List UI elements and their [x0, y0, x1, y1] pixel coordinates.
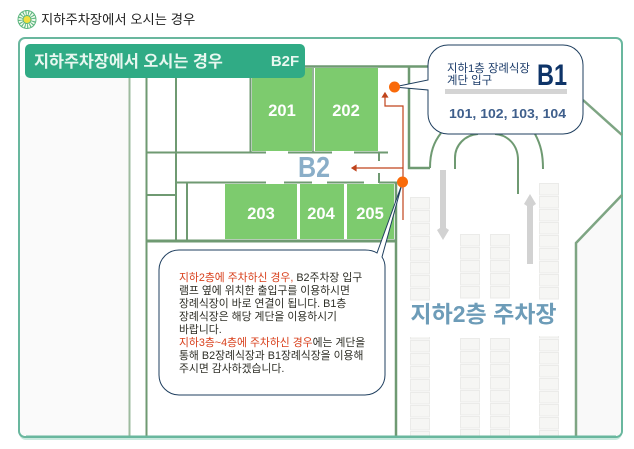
floor label: 지하2층 주차장 [410, 301, 557, 327]
callout: parking guidance: 지하2층에 주차하신 경우, B2주차장 입구 [179, 270, 362, 284]
gray direction arrow: down [437, 170, 449, 240]
callout: B1 entrance [394, 45, 583, 134]
room 204: 204 [307, 205, 336, 223]
marker: B2 entrance [397, 176, 408, 188]
room 204 [300, 184, 344, 239]
room 202 [315, 68, 378, 151]
room 203 [225, 184, 297, 239]
gray direction arrow: up [524, 194, 536, 264]
callout: B1 entrance: B1 [537, 59, 567, 92]
callout: B1 entrance: 지하1층 장례식장 [447, 61, 530, 75]
room 205: 205 [356, 205, 384, 223]
room 201 [252, 68, 312, 151]
header bar [25, 44, 305, 78]
room 205 [347, 184, 394, 239]
B2 label: B2 [298, 152, 330, 184]
room 201: 201 [268, 102, 296, 120]
callout: parking guidance: 바랍니다. [179, 323, 222, 336]
header bar: 지하주차장에서 오시는 경우 [34, 53, 223, 71]
callout: B1 entrance: 계단 입구 [447, 74, 492, 87]
header bar: B2F [271, 53, 299, 70]
room 202: 202 [332, 102, 360, 120]
callout: parking guidance: 램프 옆에 위치한 출입구를 이용하시면 [179, 283, 350, 297]
callout: B1 entrance: 101, 102, 103, 104 [449, 106, 567, 121]
callout: parking guidance: 장례식장이 바로 연결이 됩니다. B1층 [179, 297, 346, 310]
title: 지하주차장에서 오시는 경우 [41, 12, 195, 27]
frame bottom edge [26, 436, 616, 438]
parking spaces [410, 183, 559, 436]
callout: parking guidance: 장례식장은 해당 계단을 이용하시기 [179, 309, 337, 323]
title icon: flower [18, 10, 36, 29]
red route arrows [352, 93, 403, 220]
marker: B1 stairs [389, 82, 400, 92]
callout: parking guidance: 지하3층~4층에 주차하신 경우에는 계단을 [179, 335, 365, 349]
callout: parking guidance: 주시면 감사하겠습니다. [179, 361, 284, 375]
floor plan walls [130, 66, 622, 436]
callout: parking guidance: 통해 B2장례식장과 B1장례식장을 이용해 [179, 348, 363, 362]
room 203: 203 [247, 205, 275, 223]
callout: parking guidance [159, 184, 402, 395]
